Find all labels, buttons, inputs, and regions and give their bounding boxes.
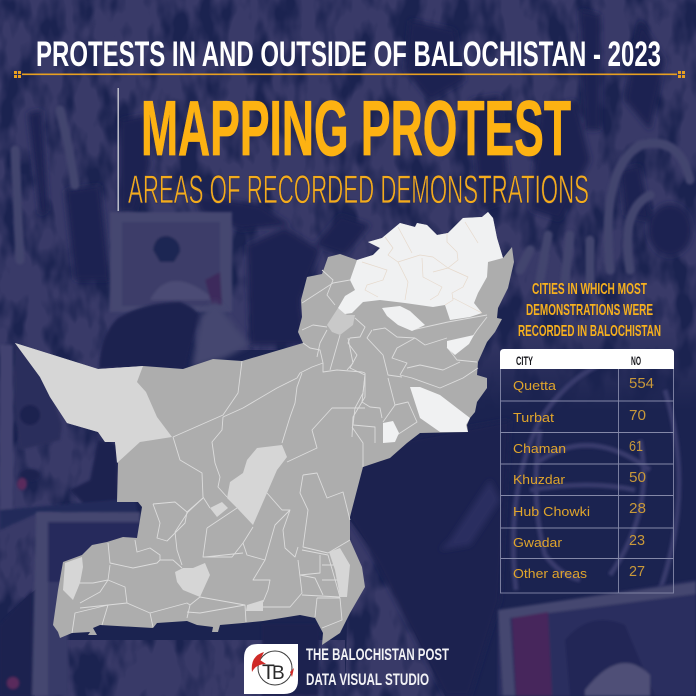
city names: Gwadar: [513, 535, 563, 550]
boundaries within white districts: [362, 222, 482, 313]
district boundaries: [72, 270, 487, 633]
city names: Quetta: [513, 378, 557, 393]
icon: TBP logo: T: [262, 661, 275, 684]
icon: TBP logo: B: [272, 663, 285, 684]
city names: [513, 378, 590, 581]
dark hair of central figure: [99, 302, 200, 369]
footer credit: DATA VISUAL STUDIO: [306, 671, 429, 689]
city names: Khuzdar: [513, 472, 566, 487]
counts: [629, 376, 654, 580]
city names: Turbat: [513, 410, 554, 425]
counts: 554: [629, 376, 654, 392]
table heading: [518, 281, 661, 340]
table header: [500, 349, 674, 369]
counts: 23: [629, 533, 645, 549]
map: Balochistan districts: [15, 212, 514, 645]
counts: 61: [629, 439, 643, 455]
footer credit: [306, 646, 449, 689]
table grid: [500, 368, 674, 593]
dark shadows upper area: [28, 10, 692, 345]
white districts (most demonstrations): [338, 212, 503, 443]
footer credit: THE BALOCHISTAN POST: [306, 646, 449, 664]
city names: Other areas: [513, 566, 588, 581]
counts: 28: [629, 501, 646, 517]
table header: CITY: [516, 356, 533, 368]
table header: NO: [631, 356, 641, 368]
light grey districts: [15, 308, 355, 611]
figure and veil behind table: [513, 355, 679, 590]
photo frame bottom right: [498, 580, 696, 696]
data table: [500, 349, 674, 593]
icon: TBP logo: [244, 644, 298, 694]
map silhouette: [15, 212, 514, 645]
photo frame bottom left: [0, 512, 140, 696]
heading accent rule: [118, 88, 119, 211]
counts: 50: [629, 470, 646, 486]
photo frame top: [110, 212, 232, 312]
city names: Hub Chowki: [513, 504, 590, 519]
light brush strokes upper area: [15, 110, 690, 285]
title divider: [14, 71, 685, 78]
veil of central figure: [192, 300, 250, 368]
dark area under the map on the right: [345, 420, 510, 696]
counts: 70: [629, 408, 646, 424]
left floral cloth: [0, 345, 138, 530]
city names: Chaman: [513, 441, 566, 456]
counts: 27: [629, 564, 645, 580]
